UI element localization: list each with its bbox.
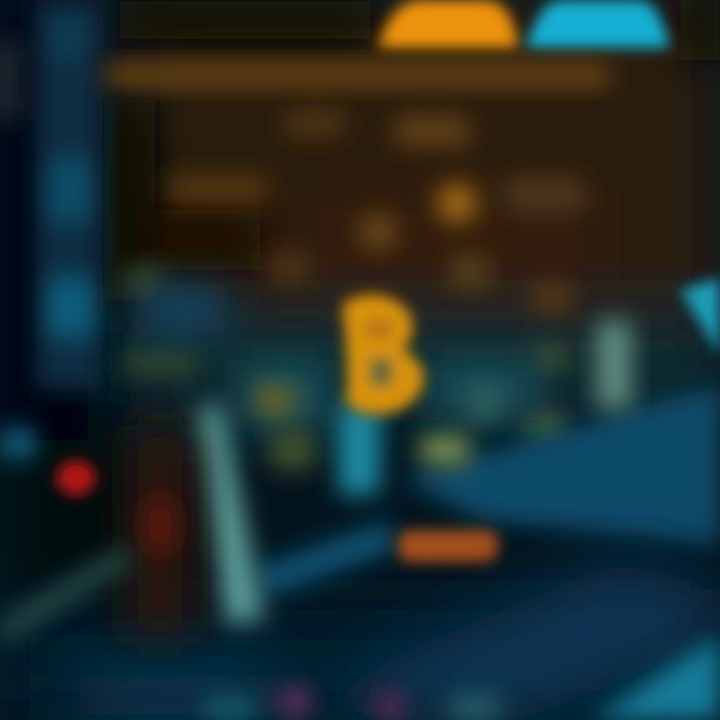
cyan bottom-right diagonal — [590, 635, 720, 720]
red indicator light — [56, 460, 96, 496]
orange bar — [398, 530, 498, 562]
left blue column — [0, 0, 102, 458]
bottom colored spots — [205, 686, 500, 720]
small glowing objects — [255, 385, 500, 470]
amber lamp — [378, 0, 518, 48]
top dark strip — [105, 0, 720, 300]
pale diagonal tube — [195, 405, 265, 625]
teal bench band — [400, 385, 720, 545]
red accent in bottle — [140, 493, 180, 557]
blue glow patches — [135, 285, 540, 430]
amber heading bar — [105, 62, 610, 88]
bitcoin symbol — [342, 294, 424, 415]
lower keyboard — [80, 560, 720, 720]
cyan stem — [338, 405, 380, 495]
pale vertical post — [596, 320, 632, 410]
dark red bottle — [125, 425, 195, 645]
diagonal pale strip lower left — [0, 545, 132, 645]
cyan corner shape — [680, 278, 720, 355]
cyan lamp — [525, 0, 670, 48]
blurred text labels — [122, 110, 585, 441]
